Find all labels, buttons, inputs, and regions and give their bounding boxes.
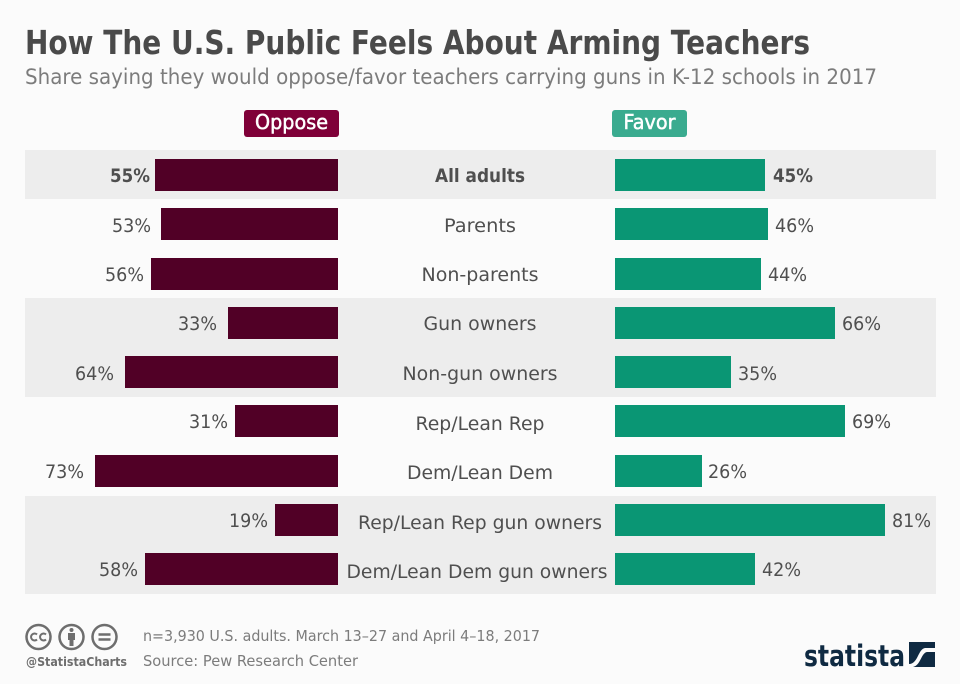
- oppose values: 53%: [112, 215, 151, 237]
- favor values: [708, 165, 931, 581]
- subtitle: Share saying they would oppose/favor teachers carrying guns in K-12 schools in 2017: [25, 65, 877, 89]
- legend: favor: Favor: [624, 110, 676, 134]
- category labels: Non-gun owners: [402, 363, 558, 385]
- oppose bars: [95, 159, 338, 585]
- source: Source: Pew Research Center: [143, 652, 359, 670]
- category labels: Non-parents: [422, 264, 538, 286]
- favor values: 66%: [842, 313, 881, 335]
- row bands: [25, 150, 936, 594]
- oppose values: 19%: [229, 510, 268, 532]
- category labels: [346, 165, 608, 583]
- oppose values: 33%: [178, 313, 217, 335]
- favor values: 35%: [738, 363, 777, 385]
- favor values: 42%: [762, 559, 801, 581]
- category labels: Parents: [444, 215, 516, 237]
- oppose values: 73%: [45, 461, 84, 483]
- note: n=3,930 U.S. adults. March 13–27 and April 4–18, 2017: [143, 627, 540, 645]
- favor values: 81%: [892, 510, 931, 532]
- icon: creative commons: [26, 625, 116, 649]
- favor values: 44%: [768, 264, 807, 286]
- category labels: Dem/Lean Dem: [407, 462, 553, 484]
- favor bars: [615, 159, 885, 585]
- title: How The U.S. Public Feels About Arming Teachers: [25, 23, 810, 62]
- oppose values: 31%: [189, 411, 228, 433]
- statista logo: statista: [804, 639, 905, 673]
- oppose values: 64%: [75, 363, 114, 385]
- oppose values: [45, 165, 268, 581]
- favor values: 69%: [852, 411, 891, 433]
- category labels: Rep/Lean Rep gun owners: [358, 512, 602, 534]
- oppose values: 56%: [105, 264, 144, 286]
- category labels: Dem/Lean Dem gun owners: [346, 561, 608, 583]
- oppose values: 58%: [99, 559, 138, 581]
- legend: oppose: Oppose: [255, 110, 328, 134]
- oppose values: 55%: [110, 165, 150, 187]
- favor values: 26%: [708, 461, 747, 483]
- legend: favor: [612, 110, 687, 137]
- category labels: Rep/Lean Rep: [416, 413, 544, 435]
- social handle: @StatistaCharts: [26, 655, 127, 669]
- favor values: 46%: [775, 215, 814, 237]
- category labels: All adults: [435, 165, 525, 187]
- category labels: Gun owners: [424, 313, 536, 335]
- favor values: 45%: [773, 165, 813, 187]
